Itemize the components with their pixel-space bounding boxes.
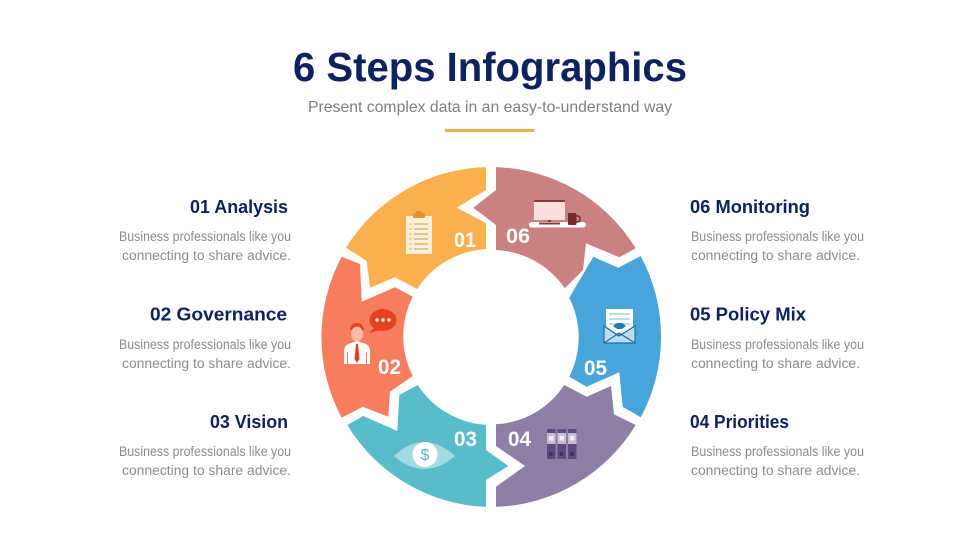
segment 02 coral: [321, 257, 413, 418]
number 03: 03: [454, 428, 477, 451]
step 06 text: Business professionals like you: [691, 229, 864, 244]
step 06 text: 06 Monitoring: [690, 196, 810, 217]
step 02 text: connecting to share advice.: [122, 356, 291, 371]
step 02 text: [119, 304, 291, 371]
step 03 text: Business professionals like you: [119, 444, 291, 459]
icon: person with speech bubble: [344, 309, 396, 364]
step 03 text: [119, 411, 291, 478]
step 04 text: [690, 411, 864, 478]
subtitle: Present complex data in an easy-to-understand way: [308, 99, 672, 116]
icon: file binders: [547, 429, 576, 459]
step 01 text: Business professionals like you: [119, 229, 291, 244]
number 05: 05: [584, 357, 607, 380]
step 04 text: Business professionals like you: [691, 444, 864, 459]
panel: left text column: [119, 196, 291, 478]
step 03 text: 03 Vision: [210, 411, 288, 432]
step 04 text: connecting to share advice.: [691, 463, 860, 478]
icon: eye with dollar: $: [421, 447, 430, 464]
step 06 text: [690, 196, 864, 263]
number 01: 01: [454, 229, 476, 252]
chart: six step ring: [321, 167, 661, 507]
step 04 text: 04 Priorities: [690, 411, 789, 432]
segment 06 rose: [473, 167, 636, 288]
step 05 text: [690, 304, 864, 371]
step 01 text: connecting to share advice.: [122, 248, 291, 263]
step 03 text: connecting to share advice.: [122, 463, 291, 478]
number 04: 04: [508, 428, 531, 451]
icon: open envelope with letter: [604, 309, 635, 343]
segment 04 purple: [496, 385, 636, 507]
step 05 text: connecting to share advice.: [691, 356, 860, 371]
step 01 text: 01 Analysis: [190, 196, 288, 217]
icon: clipboard checklist: [406, 211, 432, 254]
step 05 text: Business professionals like you: [691, 337, 864, 352]
step 05 text: 05 Policy Mix: [690, 304, 807, 324]
icon: eye with dollar: [394, 442, 455, 469]
segment 01 orange: [346, 167, 486, 289]
step 06 text: connecting to share advice.: [691, 248, 860, 263]
panel: right text column: [690, 196, 864, 478]
segment 03 teal: [347, 385, 508, 507]
icon: desktop computer and mug: [529, 200, 586, 228]
number 06: 06: [506, 225, 530, 248]
step 02 text: Business professionals like you: [119, 337, 291, 352]
title underline: [445, 129, 534, 132]
step 02 text: 02 Governance: [150, 304, 287, 324]
step 01 text: [119, 196, 291, 263]
title: 6 Steps Infographics: [293, 44, 687, 90]
segment 05 blue: [569, 256, 661, 417]
number 02: 02: [378, 356, 401, 379]
